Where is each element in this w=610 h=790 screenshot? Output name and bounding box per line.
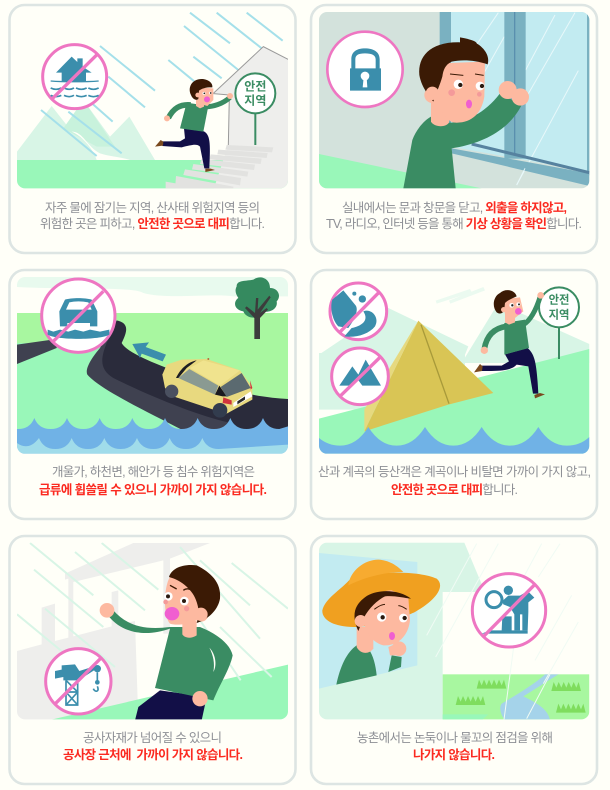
panel: farming areas — [311, 536, 597, 784]
river — [500, 674, 558, 720]
illustration: running to the safe zone — [17, 13, 288, 190]
tent — [364, 321, 493, 431]
grass tufts — [456, 680, 586, 713]
safety sign: 안전 — [549, 294, 569, 307]
running man — [474, 290, 545, 398]
stairs — [166, 145, 273, 190]
icon: no flooded car — [42, 279, 115, 352]
panel: stay indoors — [311, 5, 597, 253]
caption: 나가지 않습니다. — [413, 747, 495, 762]
icon: no flooded house — [43, 45, 107, 109]
caption: 급류에 휩쓸릴 수 있으니 가까이 가지 않습니다. — [39, 482, 267, 497]
farmer — [322, 560, 440, 685]
icon: no crane — [46, 649, 111, 714]
man — [100, 565, 233, 720]
caption: 공사장 근처에 가까이 가지 않습니다. — [63, 747, 243, 762]
tree — [235, 277, 279, 339]
water — [17, 418, 288, 455]
running man — [155, 79, 233, 172]
caption — [40, 201, 265, 231]
caption — [318, 465, 591, 497]
illustration: man near a construction site — [17, 543, 288, 720]
caption: TV, 라디오, 인터넷 등을 통해 기상 상황을 확인합니다. — [326, 216, 582, 231]
safety sign — [235, 73, 275, 145]
caption: 공사자재가 넘어질 수 있으니 — [83, 731, 222, 745]
panel: flooded roads — [10, 270, 296, 519]
icon: no field inspection — [472, 574, 546, 647]
safety sign: 지역 — [244, 93, 266, 107]
direction arrow — [132, 342, 166, 361]
caption: 안전한 곳으로 대피합니다. — [391, 482, 518, 497]
caption — [63, 731, 243, 762]
panel: construction sites — [10, 536, 296, 784]
water — [319, 427, 589, 455]
illustration: man looking through window — [319, 12, 590, 188]
safety sign: 지역 — [549, 309, 569, 322]
car — [162, 358, 252, 418]
caption — [39, 464, 267, 497]
safety sign: 안전 — [244, 80, 266, 94]
caption — [357, 731, 553, 762]
caption: 위험한 곳은 피하고, 안전한 곳으로 대피합니다. — [40, 216, 265, 231]
caption: 산과 계곡의 등산객은 계곡이나 비탈면 가까이 가지 않고, — [318, 465, 591, 479]
panel: mountains and valleys — [311, 270, 597, 519]
illustration: farmer looking through a window — [319, 543, 589, 721]
icon: no mountains — [332, 348, 388, 405]
icon: no landslide — [330, 283, 387, 340]
caption — [326, 200, 582, 231]
man — [403, 37, 529, 188]
caption: 실내에서는 문과 창문을 닫고, 외출을 하지않고, — [342, 200, 567, 215]
caption: 농촌에서는 논둑이나 물꼬의 점검을 위해 — [357, 731, 553, 745]
caption: 개울가, 하천변, 해안가 등 침수 위험지역은 — [52, 464, 255, 479]
panel: flood-prone areas — [10, 5, 296, 253]
illustration: tent in a valley — [319, 287, 589, 455]
icon: padlock — [327, 32, 403, 107]
safety sign — [539, 287, 579, 359]
illustration: car on a riverside road — [17, 277, 288, 455]
caption: 자주 물에 잠기는 지역, 산사태 위험지역 등의 — [45, 201, 260, 215]
